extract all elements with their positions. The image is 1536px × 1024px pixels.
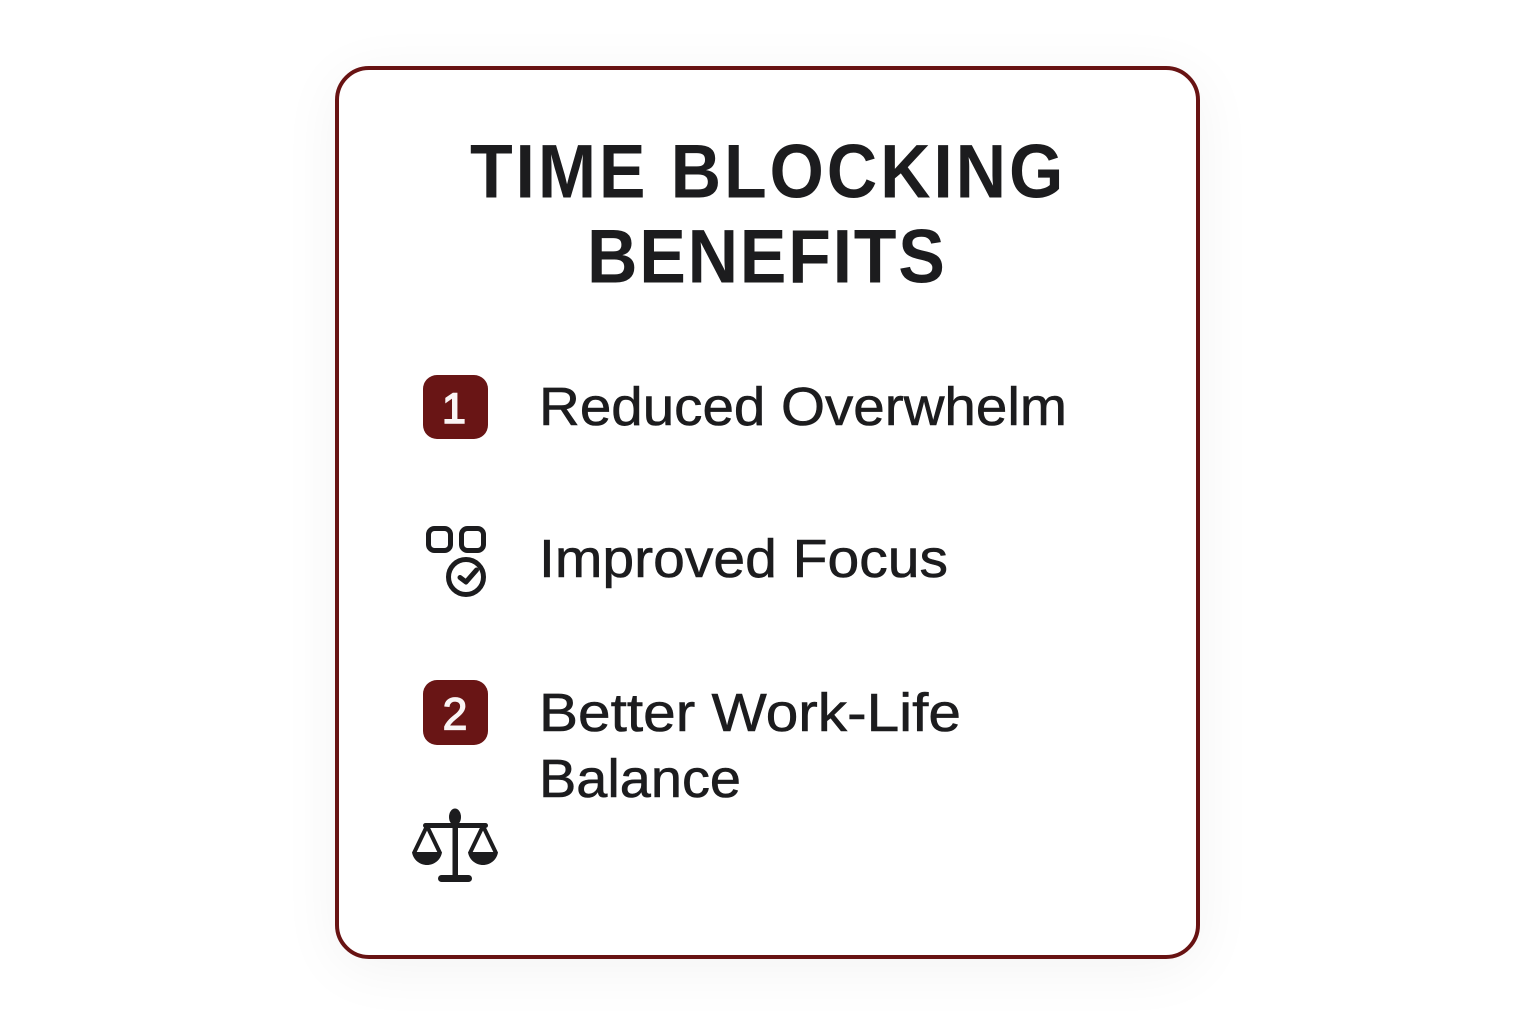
text: Improved Focus: Improved Focus bbox=[539, 529, 948, 589]
text: Reduced Overwhelm: Reduced Overwhelm bbox=[539, 377, 1067, 437]
badge: number 2 bbox=[423, 680, 488, 745]
text: Better Work-Life Balance bbox=[539, 683, 961, 809]
text: Better Work-Life Balance: Better Work-Life bbox=[539, 683, 961, 743]
panel: benefits card bbox=[335, 66, 1200, 959]
text: Better Work-Life Balance: Balance bbox=[539, 749, 741, 809]
title bbox=[470, 130, 1063, 299]
badge: number 2: 2 bbox=[442, 688, 468, 740]
icon: balance scales bbox=[412, 808, 498, 882]
icon: blocks with check mark bbox=[428, 528, 484, 594]
title: BENEFITS bbox=[587, 215, 945, 299]
badge: number 1 bbox=[423, 375, 488, 439]
title: TIME BLOCKING bbox=[470, 130, 1063, 214]
badge: number 1: 1 bbox=[442, 385, 466, 433]
